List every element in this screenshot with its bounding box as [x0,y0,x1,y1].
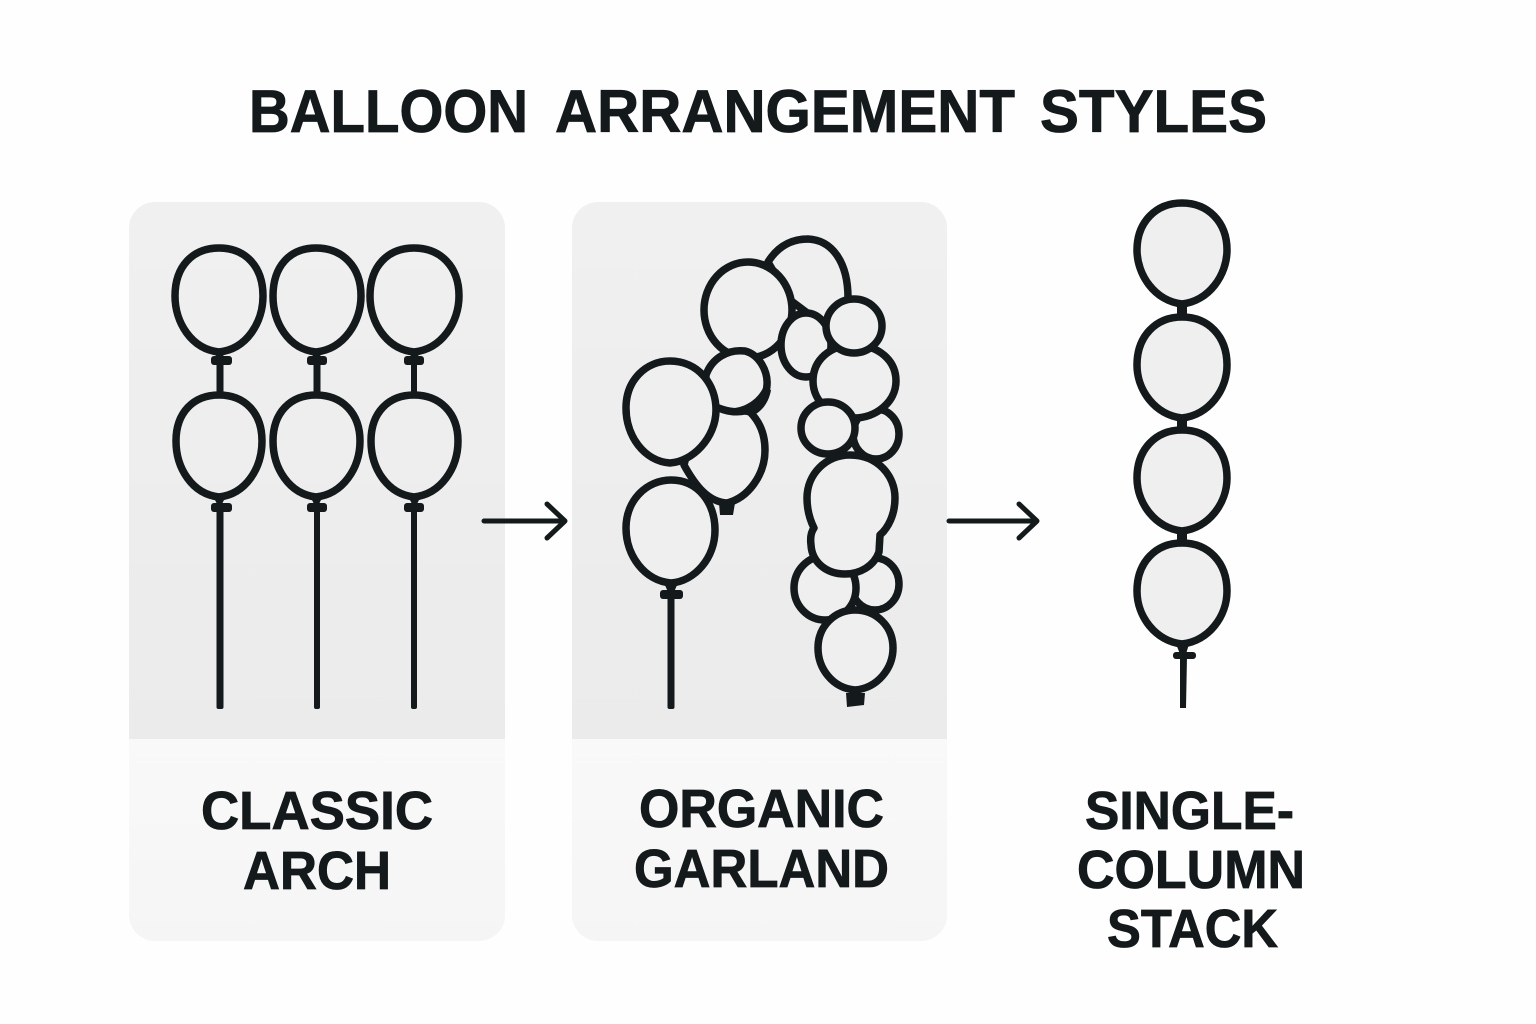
panel background: classic arch illustration area [129,202,505,739]
label: classic arch: CLASSIC [201,781,433,841]
garland left strand [626,351,771,709]
title: STYLES [1040,78,1267,145]
title: BALLOON [249,78,528,145]
balloon column 3 [370,248,459,709]
label: single-column stack [1077,781,1305,959]
title [249,78,1267,145]
label: organic garland [634,779,889,899]
icon: classic arch balloons [175,248,459,709]
label: single-column stack: STACK [1107,899,1278,959]
panel background: organic garland label area [572,739,947,941]
garland right strand [704,239,899,707]
panel: organic garland [572,202,947,941]
label: organic garland: GARLAND [634,839,889,899]
single-column stack [1077,203,1305,959]
panel background: organic garland illustration area [572,202,947,739]
icon: single-column stack balloons [1137,203,1227,708]
icon: organic garland balloons [626,239,899,709]
panel: classic arch [129,202,505,941]
label: single-column stack: SINGLE- [1085,781,1294,841]
label: single-column stack: COLUMN [1077,840,1305,900]
label: organic garland: ORGANIC [639,779,884,839]
garland bottom knot [846,693,865,707]
label: classic arch: ARCH [243,841,391,901]
arrow: classic arch to organic garland [484,504,565,538]
balloon column 2 [273,248,361,709]
panel background: classic arch label area [129,739,505,941]
label: classic arch [201,781,433,901]
title: ARRANGEMENT [555,78,1015,145]
arrow: organic garland to single-column stack [949,504,1037,538]
balloon column 1 [175,248,263,709]
